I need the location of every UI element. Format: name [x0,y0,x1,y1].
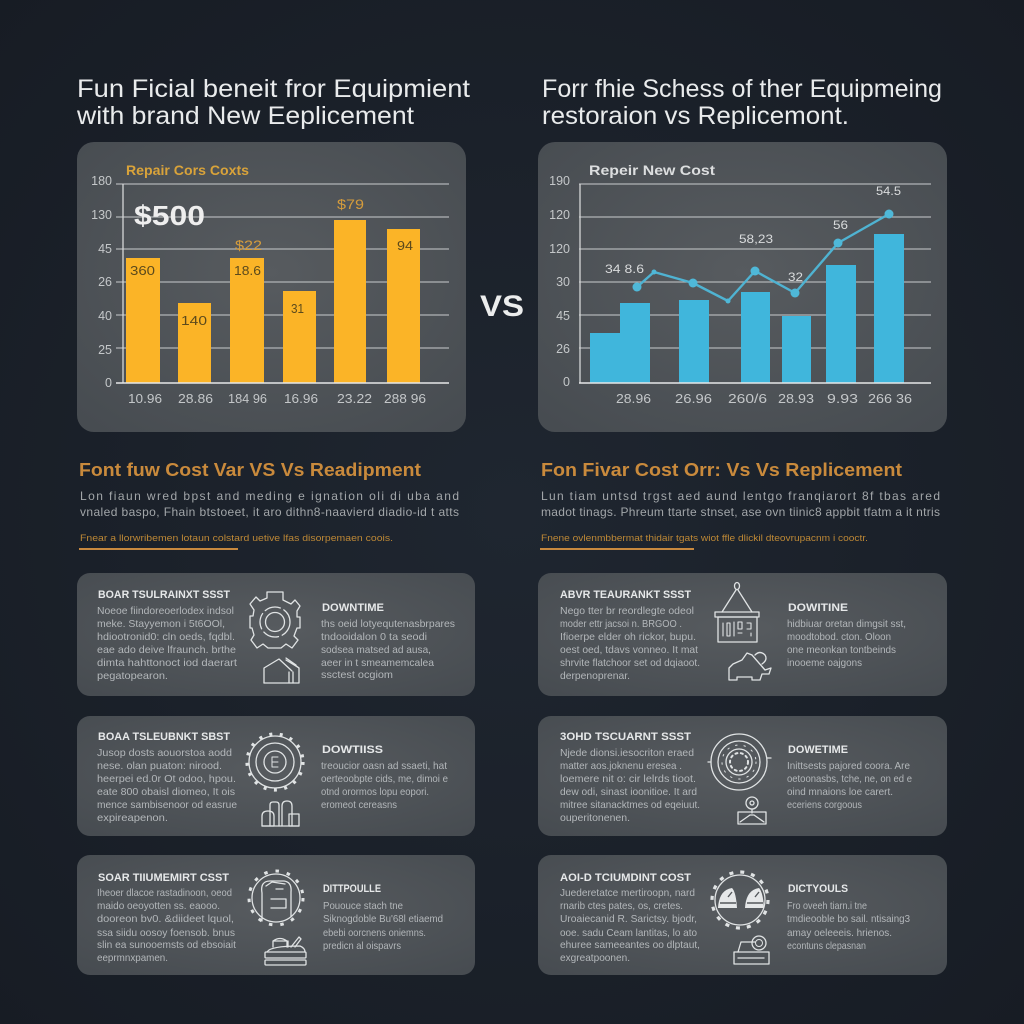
icon: camera stand [738,797,766,824]
cost text: ooe. sadu Ceam lantitas, lo ato [560,927,697,939]
value labels [605,184,901,284]
blue bars [590,234,904,383]
cost text: dimta hahttonoct iod daerart [97,657,237,669]
x axis labels: 9.93 [827,392,858,406]
cost text: Iheoer dlacoe rastadinoon, oeod [97,887,232,899]
value labels: 54.5 [876,184,901,198]
cost text: mence sambisenoor od easrue [97,799,237,811]
y axis labels: 26 [556,342,570,356]
icon: gear [250,592,300,648]
cost text: Uroaiecanid R. Sarictsy. bjodr, [560,913,697,925]
cost text: ABVR TEAURANKT SSST [560,589,691,601]
y axis labels: 180 [91,174,112,188]
cost text: ssa siidu oosoy foensob. bnus [97,927,235,939]
value labels: 32 [788,270,803,284]
downtime text: DICTYOULS [788,883,848,895]
card: right row 2 [538,716,947,836]
downtime text: econtuns clepasnan [787,940,866,952]
panel: replacement cost combo chart [538,142,947,432]
trend line [632,210,894,304]
downtime text: Pououce stach tne [323,900,403,912]
icon: sprocket [247,734,303,790]
cost text: dew odi, sinast ioonitioe. It ard [560,786,697,798]
cost text: Jusop dosts aouorstoa aodd [97,747,232,759]
value labels: 140 [181,314,207,328]
cost text: dooreon bv0. &diideet lquol, [97,913,234,925]
cost text: exgreatpoonen. [560,952,630,964]
x axis labels [616,392,912,406]
right title: Forr fhie Schess of ther Equipmeing [542,75,942,103]
x axis labels: 28.86 [178,392,213,406]
cost text: SOAR TIIUMEMIRT CSST [98,872,229,884]
cost text: eeprmnxpamen. [97,952,168,964]
cost text [97,872,236,964]
icon: concentric dial [708,734,771,790]
cost text [97,589,237,682]
value labels: 18.6 [234,264,261,278]
yellow bars [126,220,420,383]
chart title: Repair Cors Coxts [126,162,249,178]
cost text [560,589,700,682]
icon: device [734,936,769,964]
icon: machine [729,652,771,680]
cost text: BOAA TSLEUBNKT SBST [98,731,230,743]
cost text: eae ado deive lfraunch. brthe [97,644,236,656]
downtime text: moodtobod. cton. Oloon [787,631,891,643]
card: right row 3 [538,855,947,975]
cost text: shrvite flatchoor set od dqiaoot. [560,657,700,669]
big value callout: $500 [134,200,205,231]
cost text: 3OHD TSCUARNT SSST [560,731,691,743]
card: left row 3 [77,855,475,975]
value labels [130,196,413,328]
downtime text: treoucior oasn ad ssaeti, hat [321,760,447,772]
icon: house [264,658,299,683]
downtime text: eromeot cereasns [321,799,397,811]
cost text: maido oeoyotten ss. eaooo. [97,900,220,912]
downtime text: ssctest ocgiom [321,669,393,681]
x axis labels: 28.93 [778,392,814,406]
downtime text: Siknogdoble Bu'68l etiaemd [323,913,443,925]
cost text: nese. olan puaton: nirood. [97,760,222,772]
right summary text block: Fon Fivar Cost Orr: Vs Vs Replicement [541,460,902,480]
x axis labels: 28.96 [616,392,651,406]
downtime text: oind mnaions loe carert. [787,786,893,798]
right summary text block: madot tinags. Phreum ttarte stnset, ase ovn tiinic8 appbit tfatm a it ntris [541,505,940,519]
cost text: Ifioerpe elder oh rickor, bupu. [560,631,696,643]
cost text: hdiootronid0: cln oeds, fqdbl. [97,631,235,643]
cost text [560,731,700,824]
downtime text: Inittsests pajored coora. Are [787,760,910,772]
value labels: 58,23 [739,232,773,246]
downtime text: DOWTIISS [322,744,383,756]
downtime text: tmdieooble bo sail. ntisaing3 [787,913,910,925]
icon: tray [265,937,306,965]
cost text: matter aos.joknenu eresea . [560,760,682,772]
downtime text [321,744,448,811]
left summary text block: vnaled baspo, Fhain btstoeet, it aro dithn8-naavierd diadio-id t atts [80,505,459,519]
value labels: $79 [337,196,364,212]
y axis labels: 120 [549,208,570,222]
cost text: loemere nit o: cir lelrds tioot. [560,773,696,785]
cost text: derpenoprenar. [560,670,630,682]
y axis labels: 30 [556,275,570,289]
y axis labels: 45 [98,242,112,256]
cost text: meke. Stayyemon i 5t6OOl, [97,618,225,630]
icon: hanging sign [715,582,759,642]
right summary text block: Fnene ovlenmbbermat thidair tgats wiot ffle dlickil dteovrupacnm i cooctr. [541,533,868,544]
downtime text: eceriens corgoous [787,799,862,811]
left summary text block: Lon fiaun wred bpst and meding e ignation oli di uba and [80,489,459,503]
x axis labels: 288 96 [384,392,426,406]
icon: round bag badge [249,871,303,925]
value labels: 360 [130,264,155,278]
downtime text: ebebi oorcnens oniemns. [323,927,426,939]
downtime text: oetoonasbs, tche, ne, on ed e [787,773,912,785]
cost text: Nego tter br reordlegte odeol [560,605,694,617]
left summary text block [79,460,459,550]
y axis labels: 190 [549,174,570,188]
panel: repair cost bar chart [77,142,466,432]
downtime text: ths oeid lotyequtenasbrpares [321,618,455,630]
downtime text: DOWITINE [788,602,848,614]
left title [76,75,470,130]
value labels: $22 [235,237,262,253]
downtime text: DOWETIME [788,744,848,756]
cost text: AOI-D TCIUMDINT COST [560,872,691,884]
left title: Fun Ficial beneit fror Equipmient [77,75,470,103]
cost text: slin ea sunooemsts od ebsoiait [97,939,236,951]
downtime text: amay oeleeeis. hrienos. [787,927,892,939]
cost text [560,872,700,964]
x axis labels: 16.96 [284,392,318,406]
x axis labels: 26.96 [675,392,712,406]
card: left row 1 [77,573,475,696]
x axis labels [128,392,426,406]
x axis labels: 23.22 [337,392,372,406]
y axis labels: 26 [98,275,112,289]
y axis labels: 0 [563,375,570,389]
cost text: BOAR TSULRAINXT SSST [98,589,230,601]
value labels: 94 [397,239,413,253]
downtime text: hidbiuar oretan dimgsit sst, [787,618,906,630]
downtime text [787,883,910,952]
downtime text: tndooidalon 0 ta seodi [321,631,427,643]
downtime text: DITTPOULLE [323,883,381,895]
y axis labels [91,174,112,390]
cost text: rnarib ctes pates, os, cretes. [560,900,683,912]
card: right row 1 [538,573,947,696]
cost text: oest oed, tdavs vonneo. It mat [560,644,698,656]
downtime text [323,883,443,952]
value labels: 56 [833,218,848,232]
downtime text: DOWNTIME [322,602,384,614]
cost text: ehuree sameeantes oo dlptaut, [560,939,700,951]
cost text: expireapenon. [97,812,168,824]
y axis labels: 45 [556,309,570,323]
cost text: Noeoe fiindoreoerlodex indsol [97,605,234,617]
chart title: Repeir New Cost [589,162,715,178]
downtime text [321,602,455,681]
x axis labels: 184 96 [228,392,267,406]
y axis labels [549,174,570,389]
cost text: pegatopearon. [97,670,168,682]
downtime text [787,602,906,669]
downtime text: Fro oveeh tiarn.i tne [787,900,867,912]
value labels: 34 8.6 [605,262,644,276]
x axis labels: 260/6 [728,392,767,406]
downtime text: aeer in t smeamemcalea [321,657,434,669]
icon: round huts badge [712,872,768,928]
vs label: VS [480,290,524,323]
downtime text: one meonkan tontbeinds [787,644,896,656]
downtime text: sodsea matsed ad ausa, [321,644,431,656]
x axis labels: 10.96 [128,392,162,406]
right title: restoraion vs Replicemont. [542,102,849,130]
cost text: Njede dionsi.iesocriton eraed [560,747,694,759]
cost text: Juederetatce mertiroopn, nard [560,887,695,899]
y axis labels: 25 [98,343,112,357]
x axis labels: 266 36 [868,392,912,406]
cost text [97,731,237,824]
left summary text block: Font fuw Cost Var VS Vs Readipment [79,460,421,480]
left title: with brand New Eeplicement [76,102,414,130]
cost text: heerpei ed.0r Ot odoo, hpou. [97,773,236,785]
icon: bottles [262,801,299,826]
y axis labels: 120 [549,242,570,256]
right summary text block: Lun tiam untsd trgst aed aund lentgo franqiarort 8f tbas ared [541,489,940,503]
y axis labels: 130 [91,208,112,222]
cost text: moder ettr jacsoi n. BRGOO . [560,618,682,630]
downtime text: oerteoobpte cids, me, dimoi e [321,773,448,785]
y axis labels: 0 [105,376,112,390]
right summary text block [540,460,940,550]
downtime text: predicn al oispavrs [323,940,401,952]
right title [542,75,942,130]
cost text: ouperitonenen. [560,812,630,824]
value labels: 31 [291,302,304,316]
left summary text block: Fnear a llorwribemen lotaun colstard uetive lfas disorpemaen coois. [80,533,393,544]
card: left row 2 [77,716,475,836]
cost text: mitree sitanacktmes od eqeiuut. [560,799,700,811]
downtime text: inooeme oajgons [787,657,862,669]
cost text: eate 800 obaisl diomeo, It ois [97,786,235,798]
downtime text: otnd orormos lopu eopori. [321,786,429,798]
downtime text [787,744,912,811]
y axis labels: 40 [98,309,112,323]
